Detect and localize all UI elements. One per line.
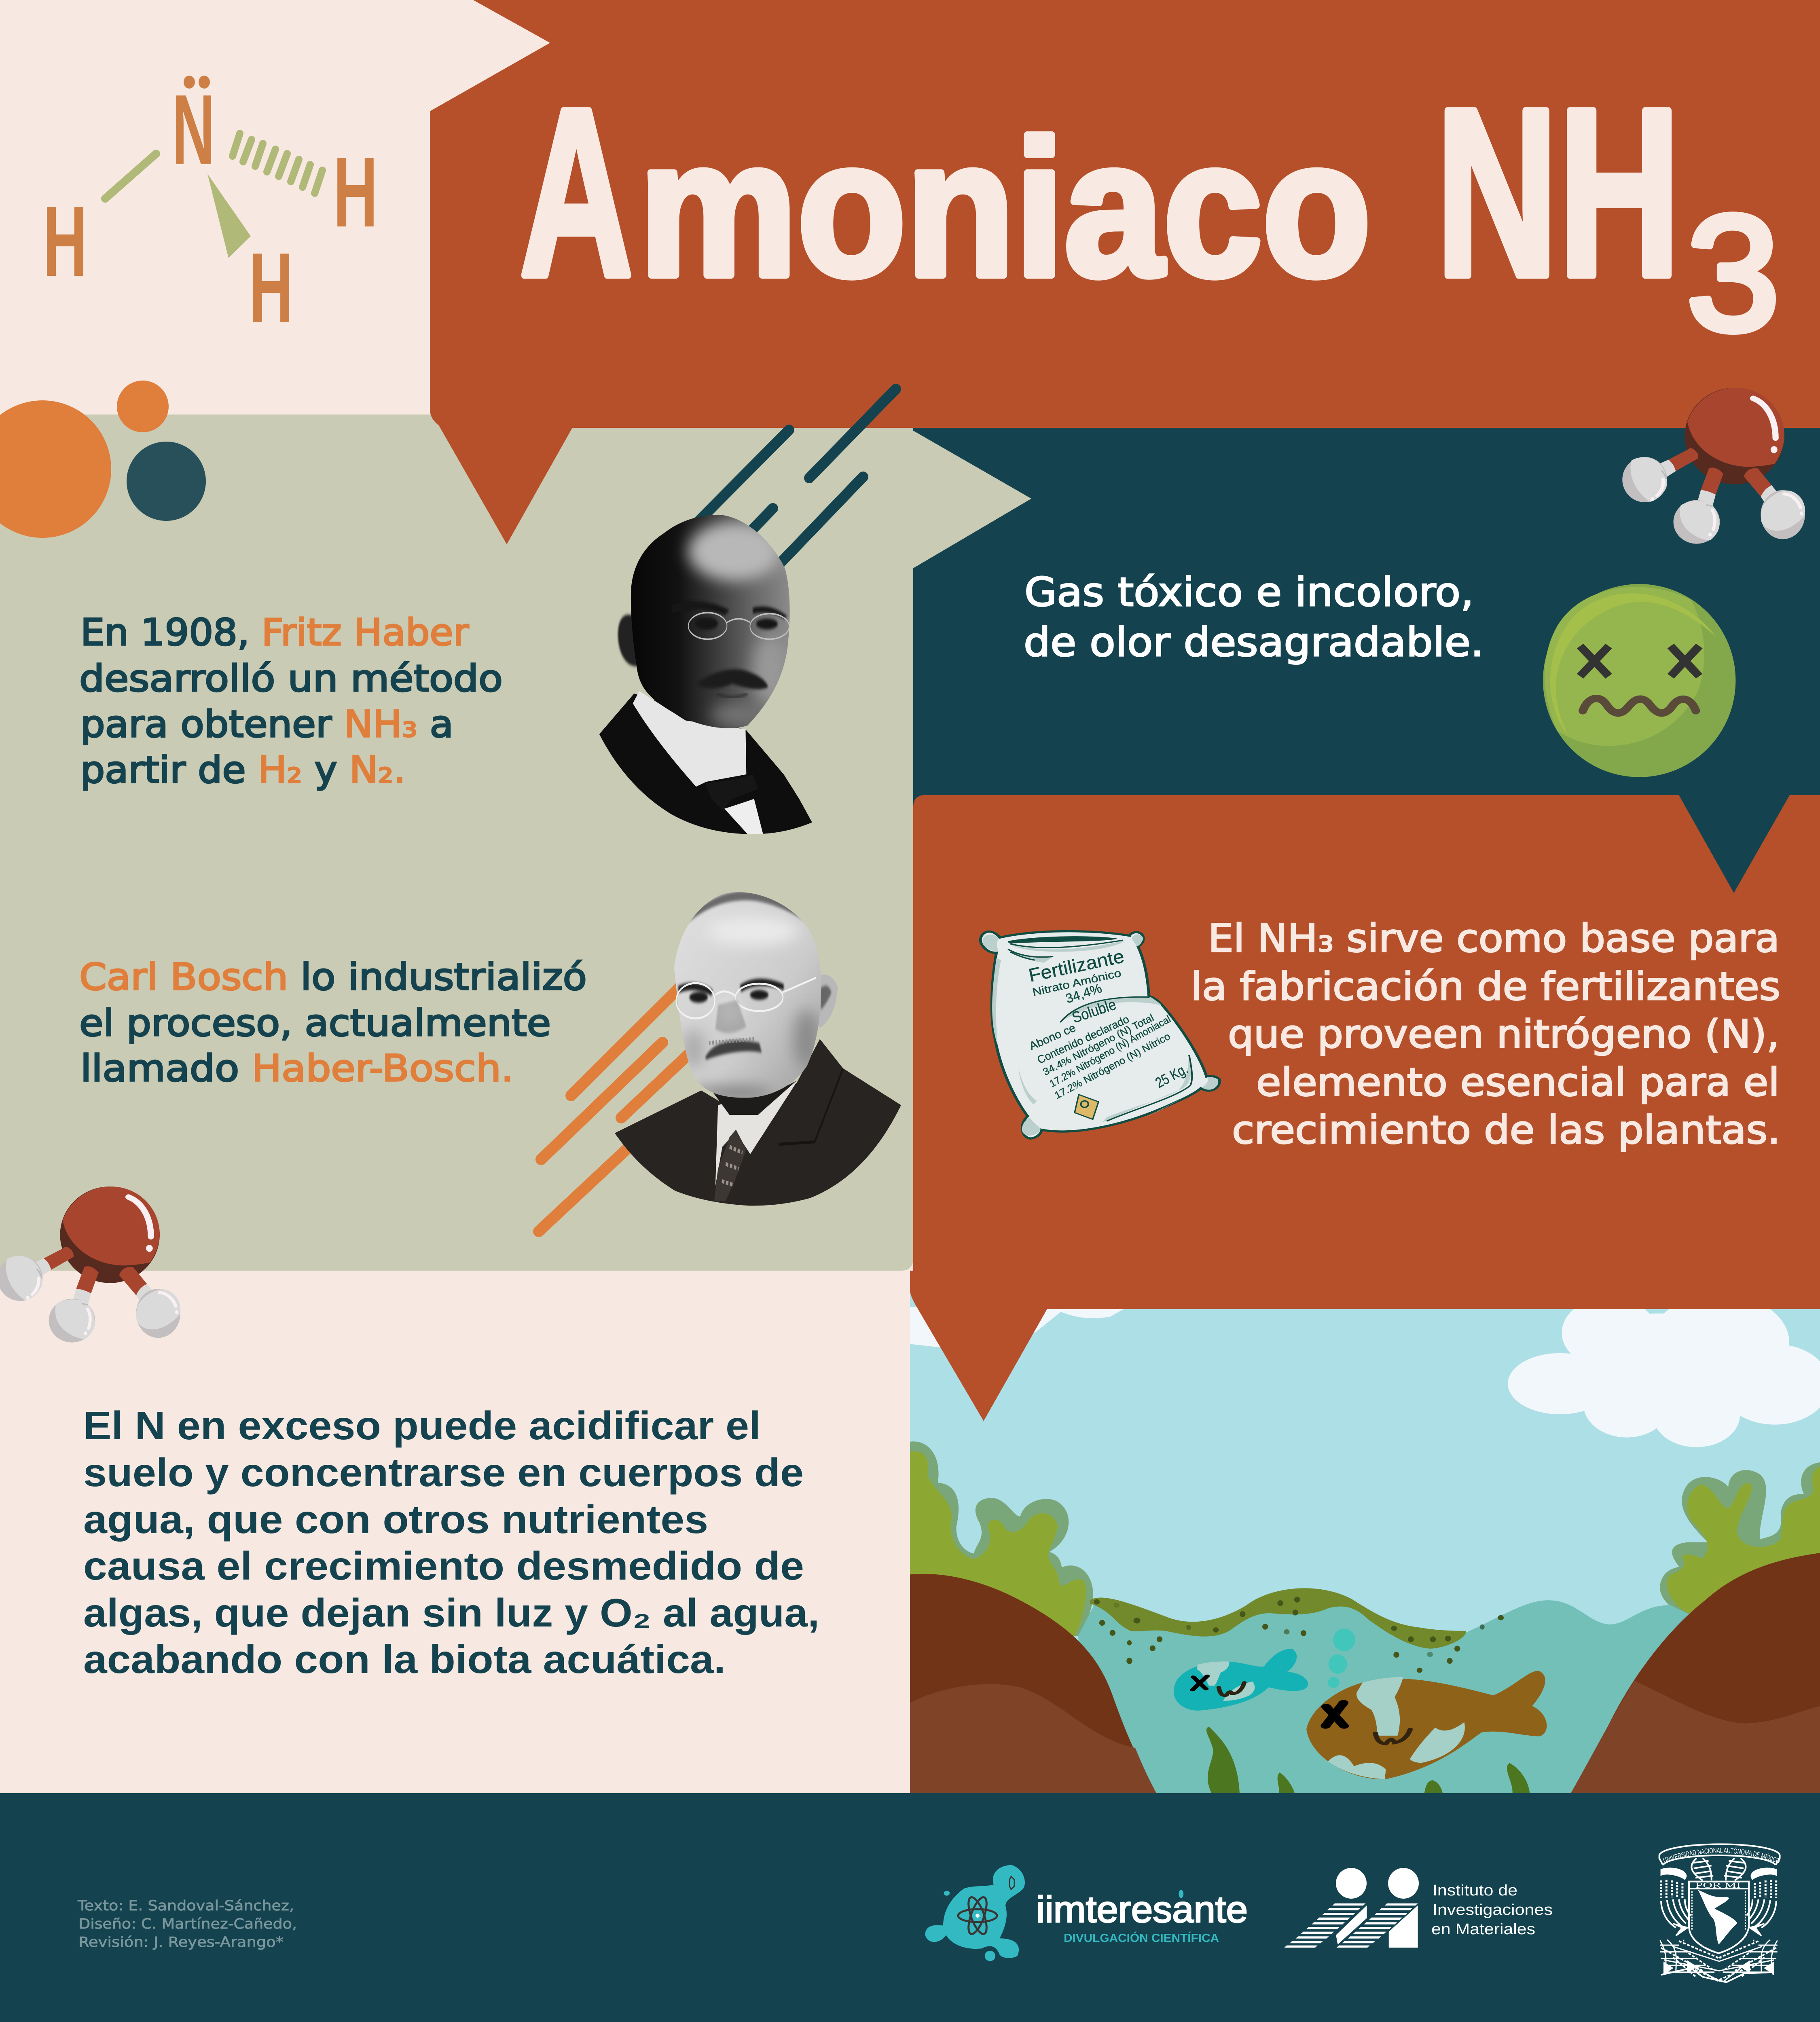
right wing [1717, 1858, 1778, 1981]
logo: Instituto de Investigaciones en Materiales [1285, 1868, 1553, 1948]
footer band [0, 1793, 1820, 2022]
text: excess nitrogen paragraph: algas, que dejan sin luz y O₂ al agua, [83, 1591, 819, 1635]
text: excess nitrogen paragraph: causa el crecimiento desmedido de [83, 1544, 804, 1588]
top arcs [1659, 1844, 1780, 1865]
logo: UNAM coat of arms [1659, 1844, 1781, 1982]
title: A [520, 59, 633, 326]
orange speed stripes [539, 988, 692, 1231]
atom [958, 1895, 997, 1936]
nopal and base [1661, 1946, 1774, 1982]
icon: fertilizer sack: 34,4% [1064, 981, 1104, 1006]
panel: title banner [430, 0, 1820, 544]
title: 3 [1687, 181, 1780, 364]
neck shadow [711, 1081, 797, 1115]
sack lettering: Fertilizante [1026, 945, 1126, 986]
icon: NH3 molecular structure [43, 74, 378, 344]
glasses [676, 978, 816, 1018]
brows and eyes [678, 979, 784, 1003]
icon: fertilizer sack: 17.2% Nitrógeno (N) Nítrico [1053, 1030, 1172, 1101]
text: Haber paragraph: partir de H₂ y N₂. [80, 749, 406, 791]
text: fertilizer paragraph: crecimiento de las plantas. [1232, 1108, 1780, 1153]
glasses [688, 613, 789, 639]
bow tie and shirt [705, 774, 758, 811]
portrait: Carl Bosch [615, 882, 901, 1206]
institute name: Instituto de [1433, 1882, 1517, 1899]
portrait: Fritz Haber [599, 510, 812, 834]
institute name: Investigaciones [1433, 1901, 1553, 1918]
icon: fertilizer sack [980, 931, 1220, 1138]
teal speed stripes [694, 389, 896, 566]
moustache and mouth [696, 669, 768, 689]
map of the Americas [1698, 1890, 1737, 1944]
nose [715, 1000, 746, 1033]
ear [815, 975, 838, 1028]
icon: fertilizer sack: Abono ce [1027, 1021, 1077, 1052]
atom labels: H [333, 136, 378, 248]
icon: sick green face [1543, 584, 1735, 777]
shield [1689, 1882, 1749, 1953]
plants right [1660, 1462, 1820, 1616]
text: Bosch paragraph [79, 956, 587, 1090]
institute name [1431, 1882, 1553, 1938]
eyes [670, 601, 787, 630]
text: Haber paragraph: para obtener NH₃ a [80, 703, 453, 746]
text: fertilizer paragraph: la fabricación de fertilizantes [1191, 964, 1780, 1009]
left wing [1660, 1858, 1721, 1981]
icon: fertilizer sack: Nitrato Amónico [1031, 967, 1122, 998]
text: credits [77, 1898, 297, 1950]
clouds [910, 1294, 1820, 1447]
head shading [688, 522, 789, 723]
title: NH [1436, 59, 1680, 326]
sky [910, 1294, 1820, 1794]
wedge bond [207, 174, 251, 258]
text: excess nitrogen paragraph: acabando con la biota acuática. [83, 1637, 726, 1681]
title: moniaco [639, 100, 1371, 316]
atom labels: H [43, 186, 87, 297]
sack body [980, 931, 1220, 1138]
algae layer [1090, 1588, 1466, 1649]
text: credits: Revisión: J. Reyes-Arango* [78, 1934, 284, 1950]
head base [629, 510, 794, 735]
stair shapes [1285, 1904, 1418, 1948]
text: Bosch paragraph: Carl Bosch lo industrializó [79, 956, 587, 998]
blob [925, 1865, 1183, 1961]
icon: ammonia ball-and-stick model, left [0, 1187, 180, 1343]
text: excess nitrogen paragraph: El N en exceso puede acidificar el [83, 1403, 761, 1448]
text: excess nitrogen paragraph: agua, que con otros nutrientes [83, 1497, 708, 1542]
head [629, 510, 794, 735]
panel: olive history panel with arrow [0, 415, 1031, 1271]
lapel line [779, 1068, 843, 1144]
text: Haber paragraph: En 1908, Fritz Haber [80, 611, 469, 654]
dead eyes [1580, 646, 1699, 676]
panel: orange fertilizer speech bubble [910, 795, 1820, 1421]
collar [633, 691, 746, 787]
icon: fertilizer sack: Soluble [1070, 996, 1118, 1027]
icon: fertilizer sack: 25 Kg. [1153, 1060, 1191, 1091]
text: Haber paragraph [79, 611, 503, 791]
hazard label [1075, 1095, 1098, 1119]
text: credits: Diseño: C. Martínez-Cañedo, [78, 1916, 297, 1932]
brown hills [910, 1574, 1157, 1794]
hashed bond [233, 133, 322, 193]
icon: fertilizer sack: 17.2% Nitrógeno (N) Amoniacal [1048, 1013, 1173, 1089]
text: excess nitrogen paragraph: suelo y concentrarse en cuerpos de [83, 1450, 804, 1495]
lake water [1078, 1597, 1723, 1794]
brown dead fish [1306, 1671, 1547, 1779]
bubbles [1328, 1629, 1355, 1688]
seaweed [1206, 1727, 1530, 1794]
atom labels: N [172, 74, 215, 186]
logo: iimteresante [925, 1865, 1248, 1961]
plants left [910, 1441, 1093, 1636]
text: Bosch paragraph: el proceso, actualmente [79, 1002, 551, 1045]
head [674, 892, 821, 1098]
institute name: en Materiales [1431, 1921, 1535, 1938]
hair [683, 891, 810, 926]
heads [1336, 1868, 1367, 1899]
text: gas description: Gas tóxico e incoloro, [1024, 569, 1474, 615]
text: gas description [1024, 569, 1484, 666]
text: fertilizer paragraph: elemento esencial para el [1256, 1060, 1780, 1105]
illustration: lake scene [910, 1294, 1820, 1794]
text: Haber paragraph: desarrolló un método [79, 658, 503, 700]
head base [670, 882, 825, 1103]
shirt collar [715, 1082, 797, 1186]
tie [714, 1129, 746, 1202]
wordmark: iimteresante [1036, 1889, 1248, 1930]
atom labels [43, 74, 378, 344]
suit [599, 694, 812, 834]
ear [618, 615, 639, 666]
panel: dark teal gas panel [913, 428, 1820, 914]
text: fertilizer paragraph: que proveen nitrógeno (N), [1228, 1012, 1780, 1057]
icon: fertilizer sack: 34.4% Nitrógeno (N) Total [1041, 1012, 1156, 1078]
text: gas description: de olor desagradable. [1024, 620, 1484, 666]
text: fertilizer paragraph [1191, 916, 1780, 1153]
text: fertilizer paragraph: El NH₃ sirve como base para [1208, 916, 1780, 961]
university name: UNIVERSIDAD NACIONAL AUTÓNOMA DE MÉXICO [1662, 1846, 1781, 1865]
text: excess nitrogen paragraph [83, 1403, 819, 1681]
wavy mouth [1583, 698, 1696, 713]
algae particles [1094, 1597, 1504, 1673]
text: Bosch paragraph: llamado Haber-Bosch. [80, 1047, 514, 1090]
suit [615, 1039, 901, 1206]
text: credits: Texto: E. Sandoval-Sánchez, [77, 1898, 294, 1914]
icon: fertilizer sack: Contenido declarado [1035, 1013, 1131, 1066]
blue dead fish [1174, 1649, 1308, 1711]
face shading [683, 916, 820, 1099]
motto: POR MI [1695, 1881, 1741, 1890]
single bond [105, 154, 156, 199]
decorative circles [0, 381, 206, 538]
molecule hexagon [1009, 1876, 1014, 1889]
moustache [705, 1041, 762, 1060]
tagline: DIVULGACIÓN CIENTÍFICA [1064, 1931, 1219, 1945]
icon: ammonia ball-and-stick model, top right [1622, 388, 1805, 544]
atom labels: H [249, 232, 293, 344]
